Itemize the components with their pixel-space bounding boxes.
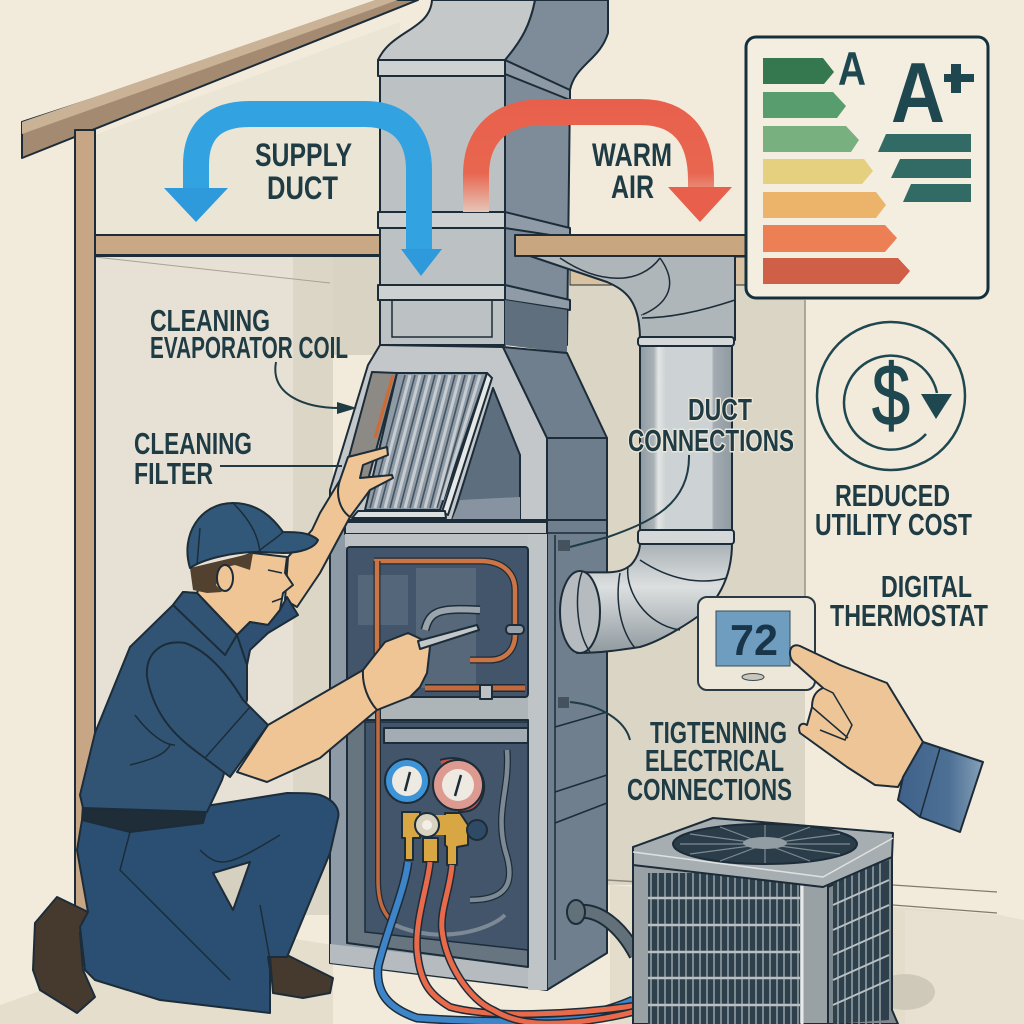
bracket: duct connection fitting <box>558 540 570 551</box>
label: cleaning filter <box>134 426 342 491</box>
neck and face <box>197 553 293 635</box>
cap <box>187 503 318 568</box>
raised hand <box>338 447 393 517</box>
main vertical duct <box>378 0 608 353</box>
fan <box>673 824 857 864</box>
technician <box>33 447 479 1013</box>
thermostat <box>698 597 815 690</box>
label: tightening electrical connections: CONNECTIONS <box>627 772 792 807</box>
text: reduced utility cost: UTILITY COST <box>815 507 972 542</box>
label: cleaning filter: CLEANING <box>134 426 252 461</box>
label: supply duct: DUCT <box>267 170 338 206</box>
blue supply duct arrow <box>164 114 442 276</box>
raised sleeve <box>237 597 298 665</box>
label: duct connections: DUCT <box>688 392 752 427</box>
label: supply duct: SUPPLY <box>255 137 352 173</box>
upper sleeve <box>147 642 268 777</box>
label: cleaning filter: FILTER <box>134 456 213 491</box>
pointing hand with sleeve <box>790 645 983 832</box>
furnace cabinet <box>330 520 607 990</box>
upper service bay <box>347 547 528 699</box>
label: cleaning evaporator coil: EVAPORATOR COIL <box>150 330 348 365</box>
bracket: electrical connection fitting <box>558 697 569 708</box>
label: cleaning evaporator coil: CLEANING <box>150 303 270 338</box>
label: warm air: WARM <box>592 137 672 173</box>
filter <box>352 373 492 518</box>
text: digital thermostat <box>830 569 988 633</box>
label: supply duct <box>255 137 352 206</box>
collar <box>173 592 237 655</box>
energy rating label: A <box>891 46 945 141</box>
outdoor condenser unit <box>633 818 898 1024</box>
label: tightening electrical connections: TIGTENNING <box>650 715 787 750</box>
right flexible duct with elbow <box>530 256 735 653</box>
refrigerant hoses <box>378 862 636 1023</box>
hair <box>190 553 253 593</box>
icon: reduced utility cost <box>817 322 965 470</box>
belt <box>82 805 207 832</box>
house framing: roof and beams <box>22 0 745 912</box>
front grille <box>648 873 800 1024</box>
lower service bay <box>347 695 528 967</box>
energy rating label: A <box>838 42 866 95</box>
ear <box>217 565 233 591</box>
raised forearm <box>285 480 350 607</box>
text: reduced utility cost: REDUCED <box>835 478 950 513</box>
lower arm <box>237 670 410 782</box>
side grille <box>833 860 889 1024</box>
condenser lid <box>633 818 893 887</box>
label: tightening electrical connections: ELECTRICAL <box>645 743 784 778</box>
label: warm air <box>592 137 672 205</box>
lower hand and tool <box>363 633 430 710</box>
icon: reduced utility cost: $ <box>872 347 910 444</box>
label: duct connections <box>570 392 794 547</box>
right shoe <box>270 955 333 998</box>
right shelf <box>515 235 747 256</box>
left shoe <box>33 897 95 1013</box>
trousers <box>77 793 338 1013</box>
label: warm air: AIR <box>611 169 654 205</box>
manifold gauges <box>385 758 487 865</box>
evaporator coil panel <box>340 372 397 490</box>
label: tightening electrical connections <box>570 702 792 807</box>
text: digital thermostat: DIGITAL <box>881 569 972 604</box>
shirt <box>80 592 247 812</box>
furnace hood with filter and coil <box>330 345 607 520</box>
text: reduced utility cost <box>815 478 972 542</box>
eye, mouth <box>268 570 283 602</box>
label: duct connections: CONNECTIONS <box>628 423 794 458</box>
thermostat: 72 <box>730 616 778 665</box>
energy rating label <box>746 37 988 298</box>
label: cleaning evaporator coil <box>150 303 357 414</box>
red warm air arrow <box>476 112 732 222</box>
